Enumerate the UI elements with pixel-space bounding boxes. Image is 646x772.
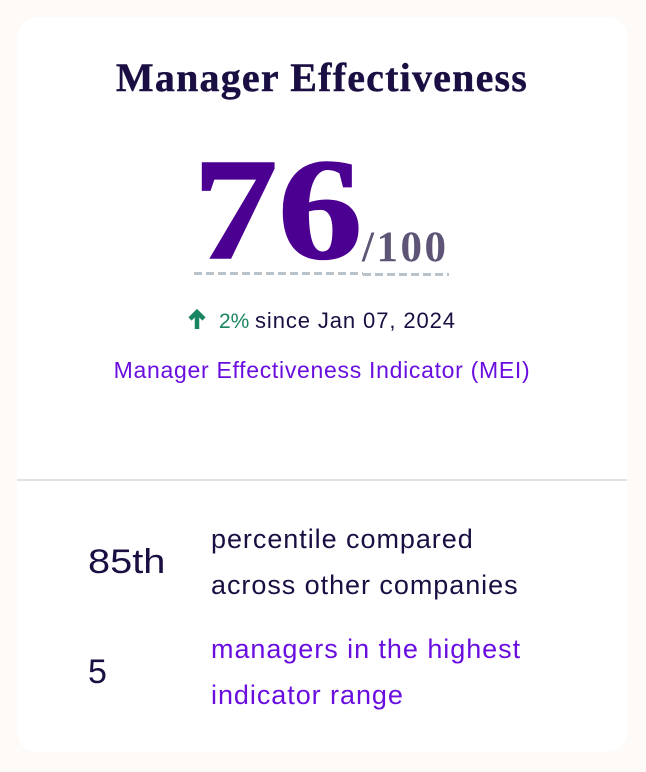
title: Manager Effectiveness bbox=[116, 55, 528, 100]
score dashed underline bbox=[194, 272, 449, 276]
managers value: 5 bbox=[88, 653, 107, 691]
score value: 76 bbox=[193, 130, 363, 290]
percentile value: 85th bbox=[88, 543, 165, 581]
stat: top managers bbox=[88, 634, 521, 710]
percentile description: percentile compared bbox=[211, 524, 474, 554]
percentile description: across other companies bbox=[211, 570, 519, 600]
managers description: managers in the highest bbox=[211, 634, 521, 664]
stat: percentile bbox=[88, 524, 519, 600]
score maximum: /100 bbox=[362, 224, 448, 271]
managers description bbox=[211, 634, 521, 710]
indicator link: Manager Effectiveness Indicator (MEI) bbox=[114, 357, 530, 383]
trend percentage: 2% bbox=[219, 310, 249, 333]
trend line bbox=[188, 308, 456, 333]
divider bbox=[17, 479, 627, 481]
icon: up arrow bbox=[188, 309, 206, 329]
managers description: indicator range bbox=[211, 680, 404, 710]
percentile description bbox=[211, 524, 519, 600]
trend date: since Jan 07, 2024 bbox=[255, 308, 456, 333]
